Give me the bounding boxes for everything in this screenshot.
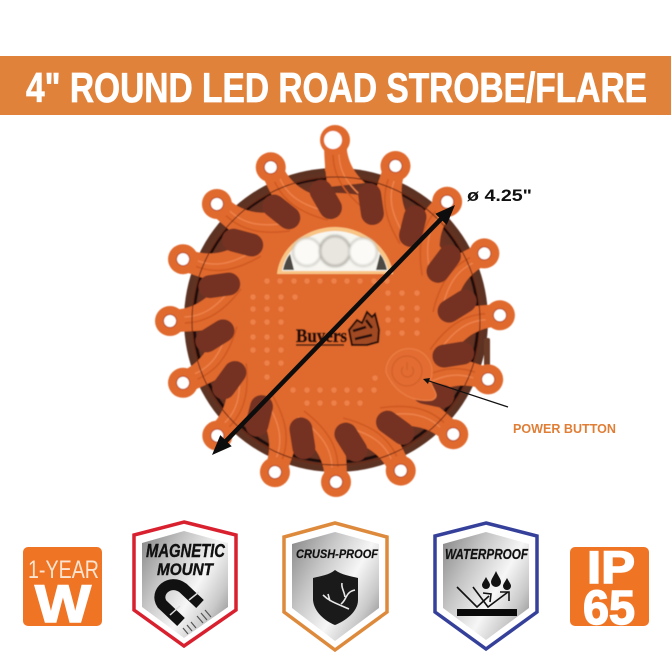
raised dots — [253, 281, 417, 403]
icon: cracked shield — [313, 570, 358, 625]
badge: 1-year warranty — [23, 547, 102, 634]
badge: magnetic mount: MAGNETIC — [146, 540, 226, 561]
power button — [386, 349, 436, 400]
badge: 1-year warranty: W — [35, 575, 91, 634]
badge: waterproof — [435, 523, 537, 649]
icon: magnet — [160, 585, 211, 634]
badge: crush-proof: CRUSH-PROOF — [296, 549, 379, 561]
badge: IP65: 65 — [583, 582, 635, 635]
power button label: POWER BUTTON — [513, 422, 616, 436]
dimension label: ø 4.25" — [467, 187, 532, 205]
dimension arrow — [212, 205, 455, 455]
badge: waterproof: WATERPROOF — [445, 547, 529, 563]
Buyers logo — [296, 312, 379, 347]
arms with hanging loops — [155, 125, 516, 499]
badge: IP65: IP — [587, 542, 635, 593]
product: LED road flare — [155, 125, 516, 499]
badge: magnetic mount — [134, 522, 236, 646]
orange centre body — [208, 193, 464, 449]
Buyers logo: Buyers — [296, 326, 347, 347]
lens gaps between arms — [191, 175, 481, 466]
icon: water drops and surface — [457, 571, 517, 616]
badge: IP65 — [570, 542, 649, 635]
badge: crush-proof — [284, 523, 387, 650]
power button pointer arrow — [423, 378, 508, 407]
LED window — [277, 227, 393, 274]
dark lens disc — [184, 168, 490, 472]
badge: magnetic mount: MOUNT — [157, 560, 214, 579]
badge: 1-year warranty: 1-YEAR — [28, 556, 99, 584]
